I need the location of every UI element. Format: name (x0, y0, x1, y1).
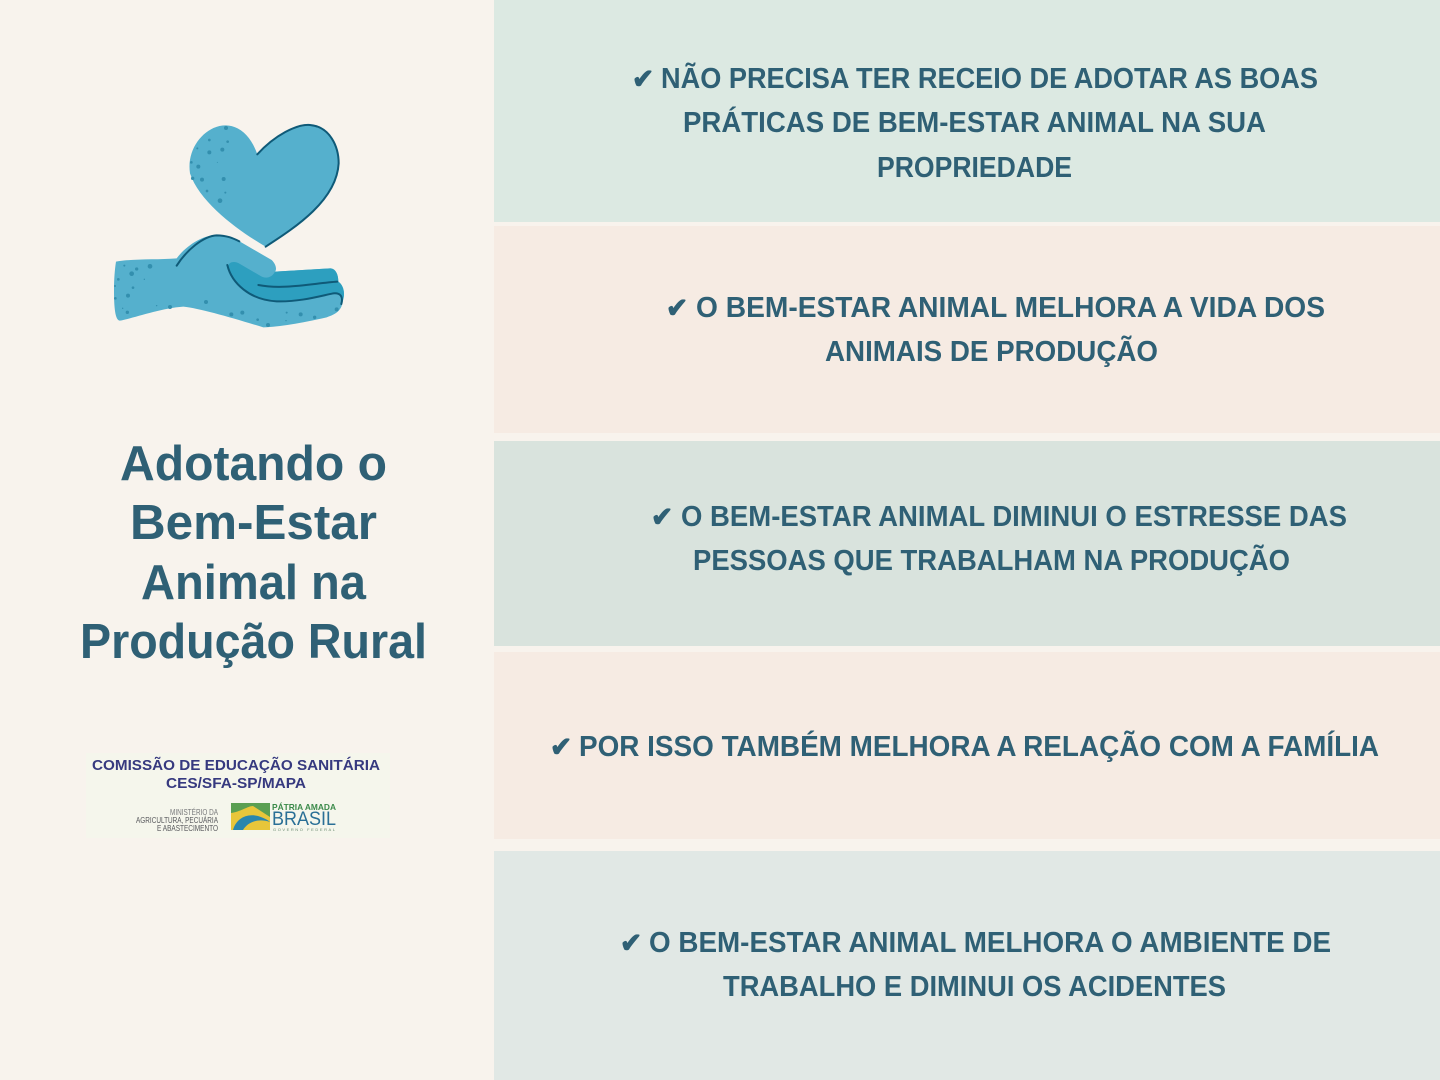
panel: diminui o estresse: O BEM-ESTAR ANIMAL DIMINUI O ESTRESSE DAS (681, 501, 1347, 533)
panel: não precisa ter receio: ✔ (632, 64, 654, 95)
panel: melhora a vida dos animais (494, 226, 1440, 433)
title: Animal na (141, 556, 367, 610)
logo block: comissão de educação sanitária: AGRICULTURA, PECUÁRIA (136, 816, 219, 825)
panel: diminui o estresse: ✔ (651, 502, 673, 533)
logo block: comissão de educação sanitária: CES/SFA-SP/MAPA (166, 776, 307, 792)
panel: não precisa ter receio: NÃO PRECISA TER RECEIO DE ADOTAR AS BOAS (661, 61, 1318, 95)
heart (189, 125, 339, 247)
logo block: comissão de educação sanitária: BRASIL (272, 809, 336, 830)
logo block: comissão de educação sanitária (86, 753, 390, 838)
logo block: comissão de educação sanitária: PÁTRIA AMADA (272, 802, 336, 812)
icon: brasil flag emblem (231, 803, 270, 830)
hand (114, 235, 344, 327)
panel: ambiente de trabalho: ✔ (620, 928, 642, 959)
title: Adotando o (120, 437, 387, 491)
panel: melhora a vida dos animais: O BEM-ESTAR ANIMAL MELHORA A VIDA DOS (696, 292, 1325, 324)
panel: não precisa ter receio (494, 0, 1440, 222)
panel: ambiente de trabalho: TRABALHO E DIMINUI OS ACIDENTES (723, 971, 1226, 1003)
logo block: comissão de educação sanitária: COMISSÃO DE EDUCAÇÃO SANITÁRIA (92, 756, 381, 774)
title: Produção Rural (80, 615, 427, 669)
panel: ambiente de trabalho (494, 851, 1440, 1080)
panel: diminui o estresse (494, 441, 1440, 646)
icon: hand holding heart (114, 125, 344, 327)
panel: ambiente de trabalho: O BEM-ESTAR ANIMAL MELHORA O AMBIENTE DE (649, 927, 1331, 959)
panel: melhora a vida dos animais: ANIMAIS DE PRODUÇÃO (825, 334, 1158, 368)
panel: diminui o estresse: PESSOAS QUE TRABALHAM NA PRODUÇÃO (693, 543, 1290, 577)
logo block: comissão de educação sanitária: E ABASTECIMENTO (157, 824, 218, 833)
title: Bem-Estar (130, 496, 377, 550)
logo block: comissão de educação sanitária: GOVERNO FEDERAL (273, 827, 336, 832)
panel: não precisa ter receio: PRÁTICAS DE BEM-ESTAR ANIMAL NA SUA (683, 105, 1266, 139)
title (80, 437, 427, 669)
logo block: comissão de educação sanitária: MINISTÉRIO DA (170, 808, 219, 817)
panel: não precisa ter receio: PROPRIEDADE (877, 152, 1072, 184)
panel: relação com a família: POR ISSO TAMBÉM MELHORA A RELAÇÃO COM A FAMÍLIA (579, 729, 1379, 763)
panel: relação com a família: ✔ (550, 732, 572, 763)
panel: relação com a família (494, 652, 1440, 839)
panel: melhora a vida dos animais: ✔ (666, 293, 688, 324)
